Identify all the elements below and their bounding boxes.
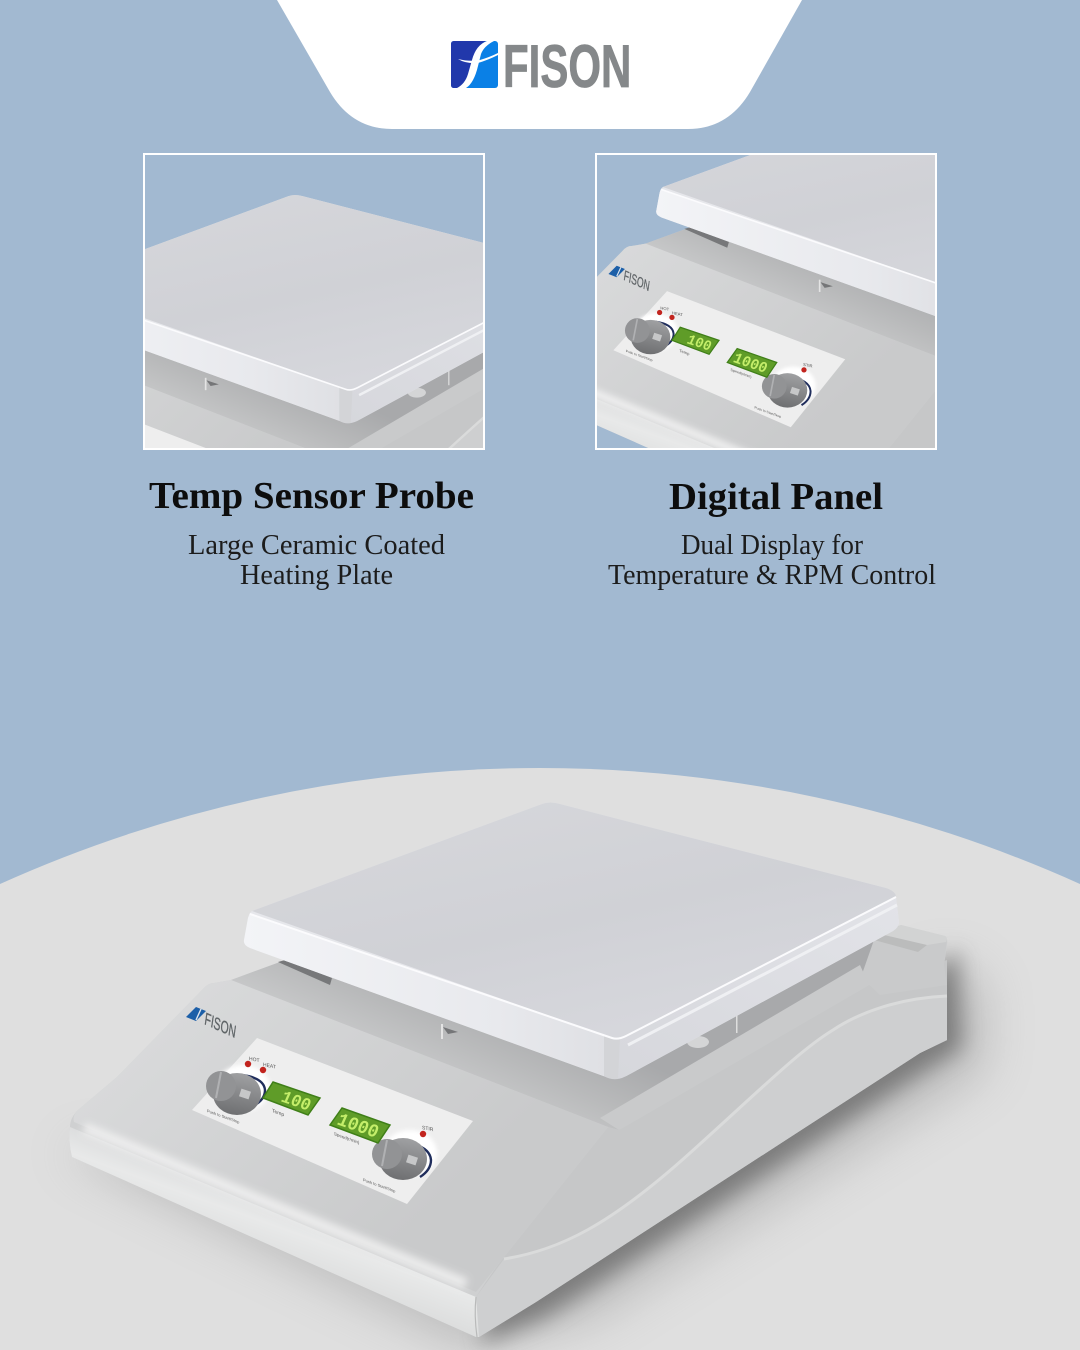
heading: digital panel: Digital Panel [669,476,883,518]
deck right lip [600,965,869,1130]
panel labels: Speed(r/min) [334,1131,360,1145]
description: digital panel: Temperature & RPM Control [608,560,936,591]
control panel [192,1038,473,1204]
lower front band [69,1127,479,1337]
logo: Fison: FISON [503,34,631,101]
panel labels: Temp [272,1108,284,1118]
panel labels: HOT [249,1056,260,1064]
sloped front face [74,980,608,1292]
highlight on front band [84,1128,466,1284]
thumbnail: temp sensor probe [145,195,483,448]
description: temp sensor probe [188,530,445,591]
panel labels: Push to Start/Stop [207,1108,240,1125]
panel knob left [206,1065,270,1115]
speed display: 1000 [333,1111,382,1143]
temperature display [263,1082,320,1116]
description: temp sensor probe: Heating Plate [240,560,393,591]
right side wall lower [475,996,947,1337]
header tab [277,0,802,129]
device shadow [60,950,985,1350]
description: temp sensor probe: Large Ceramic Coated [188,530,445,561]
heading: temp sensor probe: Temp Sensor Probe [149,475,474,517]
thumbnail: digital panel [597,155,935,448]
plate left edge [244,913,606,1076]
ceramic heating plate [244,802,899,1079]
panel labels [207,1056,434,1194]
light grey circular stage [0,768,1080,1350]
panel labels: HEAT [263,1062,276,1071]
temperature display: 100 [277,1089,314,1116]
side curve crease [504,996,947,1259]
right side wall upper [475,960,947,1337]
plate front corner [604,1036,620,1079]
plate crease highlights [250,897,896,1039]
hot plate stirrer product [69,802,947,1337]
rear rail [861,925,947,995]
description: digital panel [608,530,936,591]
panel labels: Push to Start/Stop [363,1177,396,1194]
underside pins and foot [278,960,738,1048]
thumbnail frame: digital panel [596,154,936,449]
plate right edge [616,897,899,1079]
indicator lights [245,1061,426,1137]
device logo: FISON [203,1010,237,1043]
panel knob right [372,1130,437,1180]
description: digital panel: Dual Display for [681,530,864,561]
front corner seam [475,1297,477,1337]
device logo [186,1007,237,1043]
plate top face [252,802,896,1038]
thumbnail frame: temp sensor probe [144,154,484,449]
base silhouette [69,925,947,1337]
deck [231,932,880,1130]
panel labels: STIR [422,1125,434,1133]
